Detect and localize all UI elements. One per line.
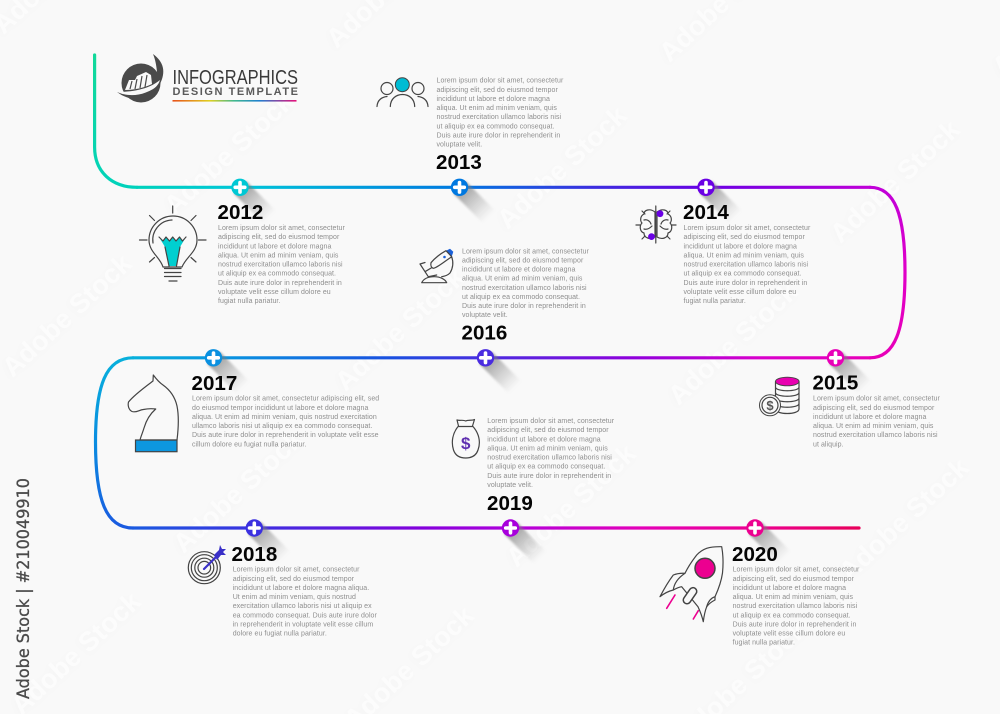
stock watermark pattern: Adobe Stock (824, 114, 966, 249)
text 2019: nostrud exercitation ullamco laboris nisi (487, 455, 612, 462)
milestone 2018 (188, 519, 378, 638)
text 2017: do eiusmod tempor incididunt ut labore et dolore magna (192, 405, 368, 412)
text 2013: Duis aute irure dolor in reprehenderit in (436, 132, 560, 139)
milestone 2013 (377, 78, 564, 223)
text 2012: ut aliquip ex ea commodo consequat. (218, 271, 336, 278)
node 2012 (231, 179, 276, 223)
node 2020 (746, 519, 791, 564)
text 2015: ut aliquip. (813, 441, 844, 448)
text 2014: Duis aute irure dolor in reprehenderit in (684, 280, 807, 287)
logo mark (117, 54, 163, 102)
year 2015: 2015 (812, 372, 858, 394)
text 2013: adipiscing elit, sed do eiusmod tempor (436, 87, 558, 94)
text 2017: ullamco laboris nisi ut aliquip ex ea commodo consequat. (192, 423, 372, 430)
text 2012: adipiscing elit, sed do eiusmod tempor (218, 234, 340, 241)
text 2020: nostrud exercitation ullamco laboris nisi (733, 603, 858, 610)
milestone 2020 (660, 519, 860, 647)
logo subtitle: DESIGN TEMPLATE (172, 86, 298, 98)
year 2014: 2014 (683, 201, 729, 224)
milestone 2012 (140, 179, 345, 305)
text 2019: Lorem ipsum dolor sit amet, consectetur (487, 418, 615, 425)
year 2016: 2016 (462, 322, 507, 344)
text 2019: incididunt ut labore et dolore magna (487, 436, 601, 443)
text 2016: ut aliquip ex ea commodo consequat. (462, 294, 580, 301)
node 2013 (451, 179, 495, 223)
text 2015: adipiscing elit, sed do eiusmod tempor (813, 405, 935, 412)
text 2015: Lorem ipsum dolor sit amet, consectetur (813, 396, 940, 403)
text 2013: Lorem ipsum dolor sit amet, consectetur (436, 78, 564, 85)
year 2020: 2020 (732, 543, 778, 566)
year 2019: 2019 (487, 492, 533, 515)
stock watermark pattern: Adobe Stock (491, 100, 633, 235)
text 2012: fugiat nulla pariatur. (218, 298, 280, 305)
icon: light bulb (140, 206, 206, 281)
year 2018: 2018 (232, 543, 277, 566)
text 2019: adipiscing elit, sed do eiusmod tempor (487, 427, 609, 434)
icon: money bag (452, 420, 479, 458)
node 2016 (477, 349, 521, 394)
text 2012: nostrud exercitation ullamco laboris nisi (218, 262, 343, 269)
text 2017: Lorem ipsum dolor sit amet, consectetur adipiscing elit, sed (192, 396, 379, 403)
icon: chess knight (128, 375, 178, 452)
timeline line (95, 55, 905, 528)
text 2017: aliqua. Ut enim ad minim veniam, quis nostrud exercitation (192, 414, 377, 421)
text 2013: nostrud exercitation ullamco laboris nisi (436, 114, 562, 121)
stock watermark pattern: Adobe Stock (662, 276, 804, 411)
text 2020: fugiat nulla pariatur. (733, 640, 795, 647)
text 2016: nostrud exercitation ullamco laboris nisi (462, 285, 587, 292)
stock watermark pattern: Adobe Stock (158, 86, 300, 221)
icon: coins: $ (766, 398, 774, 413)
text 2014: fugiat nulla pariatur. (684, 298, 746, 305)
text 2016: incididunt ut labore et dolore magna (462, 267, 576, 274)
text 2015: aliqua. Ut enim ad minim veniam, quis (813, 423, 934, 430)
text 2016: adipiscing elit, sed do eiusmod tempor (462, 257, 584, 264)
stock watermark pattern: Adobe Stock (0, 248, 138, 383)
text 2014: nostrud exercitation ullamco laboris nisi (684, 262, 809, 269)
text 2012: aliqua. Ut enim ad minim veniam, quis (218, 252, 339, 259)
text 2018: dolore eu fugiat nulla pariatur. (233, 631, 327, 638)
text 2019: Duis aute irure dolor in reprehenderit in (487, 473, 611, 480)
text 2016: voluptate velit. (462, 312, 508, 319)
text 2012: incididunt ut labore et dolore magna (218, 243, 332, 250)
text 2018: exercitation ullamco laboris nisi ut aliquip ex (233, 603, 372, 610)
text 2020: ut aliquip ex ea commodo consequat. (733, 612, 851, 619)
text 2020: aliqua. Ut enim ad minim veniam, quis (733, 594, 854, 601)
text 2012: Duis aute irure dolor in reprehenderit in (218, 280, 342, 287)
text 2014: voluptate velit esse cillum dolore eu (684, 289, 796, 296)
icon: rocket (660, 547, 723, 622)
side credit: Adobe Stock number: Adobe Stock | #210049910 (14, 478, 33, 699)
text 2016: Lorem ipsum dolor sit amet, consectetur (462, 248, 589, 255)
node 2014 (697, 179, 742, 223)
text 2014: ut aliquip ex ea commodo consequat. (684, 271, 802, 278)
text 2020: incididunt ut labore et dolore magna (733, 585, 846, 592)
icon: microscope (420, 249, 453, 283)
stock watermark pattern: Adobe Stock (500, 438, 642, 573)
text 2013: incididunt ut labore et dolore magna (436, 96, 550, 103)
text 2014: aliqua. Ut enim ad minim veniam, quis (684, 252, 804, 259)
text 2013: voluptate velit. (436, 142, 482, 149)
milestone 2016 (420, 248, 589, 394)
text 2013: aliqua. Ut enim ad minim veniam, quis (436, 105, 557, 112)
text 2013: ut aliquip ex ea commodo consequat. (436, 123, 555, 130)
logo (117, 54, 298, 102)
icon: people (377, 78, 428, 106)
text 2018: Ut enim ad minim veniam, quis nostrud (233, 594, 356, 601)
text 2014: adipiscing elit, sed do eiusmod tempor (684, 234, 805, 241)
icon: coins (760, 377, 799, 416)
logo title: INFOGRAPHICS (172, 66, 298, 89)
text 2017: Duis aute irure dolor in reprehenderit in voluptate velit esse (192, 432, 379, 439)
text 2018: adipiscing elit, sed do eiusmod tempor (233, 576, 355, 583)
node 2015 (827, 349, 871, 394)
text 2018: Lorem ipsum dolor sit amet, consectetur (233, 567, 360, 574)
text 2015: incididunt ut labore et dolore magna (813, 414, 927, 421)
text 2020: Duis aute irure dolor in reprehenderit in (733, 621, 857, 628)
text 2020: Lorem ipsum dolor sit amet, consectetur (733, 567, 860, 574)
text 2012: Lorem ipsum dolor sit amet, consectetur (218, 225, 345, 232)
text 2020: voluptate velit esse cillum dolore eu (733, 631, 845, 638)
text 2017: cillum dolore eu fugiat nulla pariatur. (192, 441, 306, 448)
icon: brain (636, 206, 676, 243)
text 2019: voluptate velit. (487, 482, 533, 489)
icon: money bag: $ (461, 434, 471, 453)
text 2016: aliqua. Ut enim ad minim veniam, quis (462, 276, 583, 283)
text 2019: ut aliquip ex ea commodo consequat. (487, 464, 605, 471)
milestone 2015 (760, 349, 940, 448)
stock watermark pattern: Adobe Stock (833, 452, 975, 587)
text 2015: nostrud exercitation ullamco laboris nisi (813, 432, 938, 439)
text 2014: incididunt ut labore et dolore magna (684, 243, 797, 250)
text 2018: in reprehenderit in voluptate velit esse cillum (233, 621, 373, 628)
text 2020: adipiscing elit, sed do eiusmod tempor (733, 576, 855, 583)
stock watermark pattern: Adobe Stock (329, 262, 471, 397)
node 2019 (502, 519, 546, 564)
node 2018 (246, 519, 290, 564)
text 2018: incididunt ut labore et dolore magna aliqua. (233, 585, 369, 592)
text 2014: Lorem ipsum dolor sit amet, consectetur (684, 225, 811, 232)
milestone 2019 (452, 418, 615, 564)
icon: target (188, 545, 226, 584)
node 2017 (205, 349, 249, 394)
year 2017: 2017 (192, 372, 237, 395)
text 2016: Duis aute irure dolor in reprehenderit in (462, 303, 586, 310)
text 2019: aliqua. Ut enim ad minim veniam, quis (487, 445, 608, 452)
milestone 2017 (128, 349, 379, 452)
year 2012: 2012 (218, 201, 263, 224)
text 2018: ea commodo consequat. Duis aute irure dolor (233, 612, 378, 619)
rainbow rule (172, 100, 296, 102)
text 2012: voluptate velit esse cillum dolore eu (218, 289, 331, 296)
stock watermark pattern: Adobe Stock (167, 424, 309, 559)
milestone 2014 (636, 179, 811, 305)
year 2013: 2013 (436, 151, 482, 174)
